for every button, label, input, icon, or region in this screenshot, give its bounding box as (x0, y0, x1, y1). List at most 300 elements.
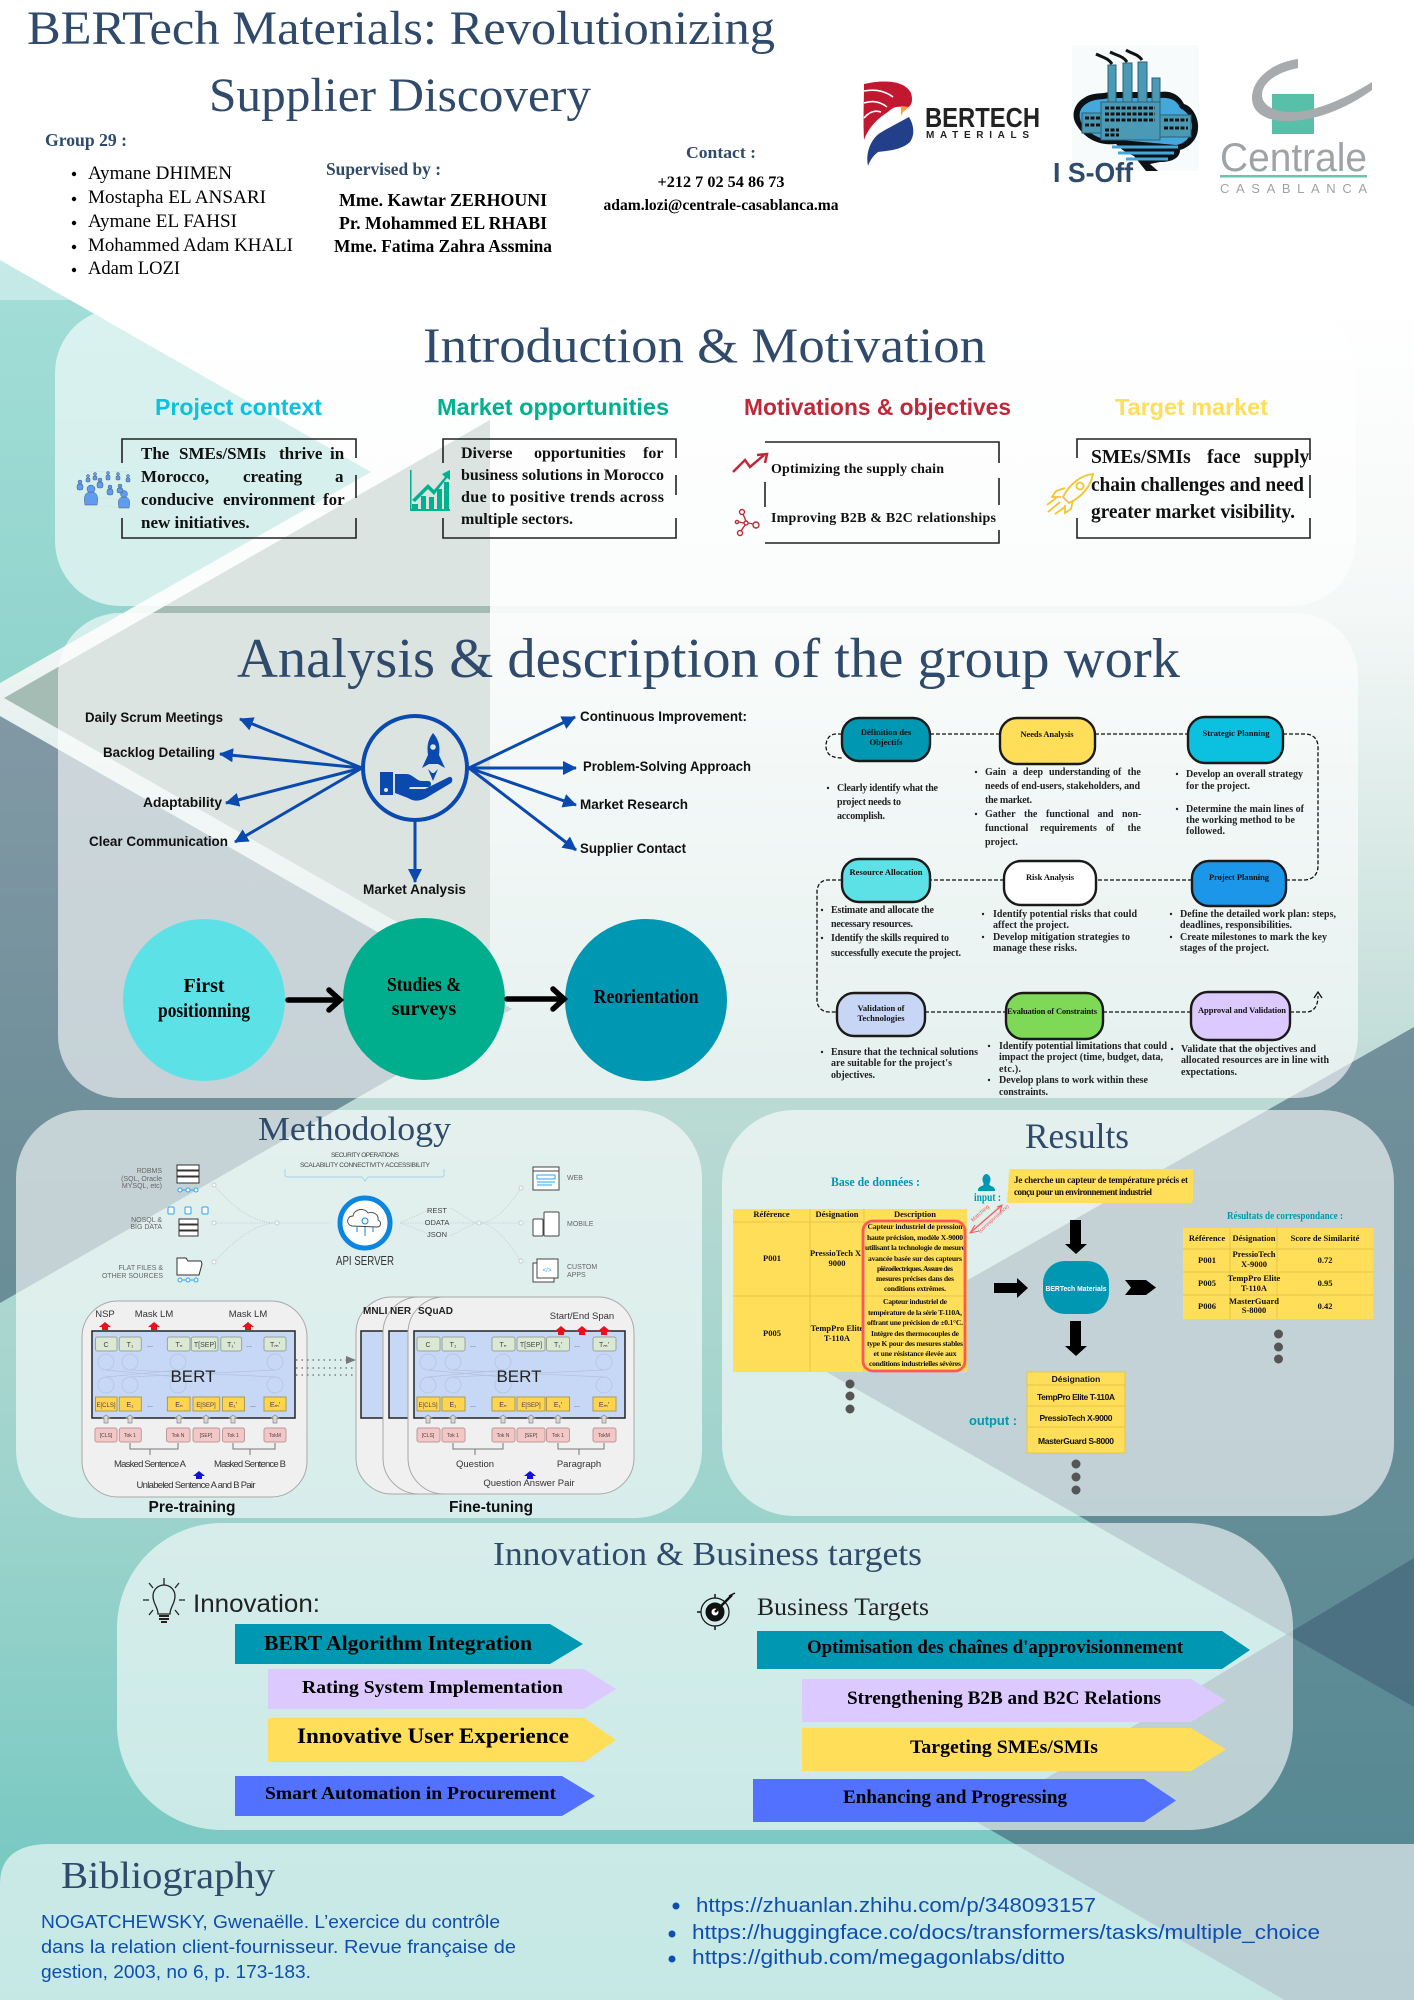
BERTech engine block: BERTech Materials (1046, 1286, 1107, 1293)
matching results table: PressioTech (1233, 1249, 1276, 1259)
matching results table: Désignation (1233, 1233, 1276, 1243)
step descriptions: Develop plans to work within these (999, 1075, 1149, 1086)
logo: BERTech Materials (864, 81, 1040, 166)
input block: Je cherche un capteur de température précis et (1014, 1175, 1188, 1185)
BERT pre-training diagram: NSP (95, 1309, 115, 1320)
step descriptions: a (1012, 767, 1018, 778)
step descriptions: followed. (1186, 826, 1226, 837)
step descriptions: manage these risks. (993, 943, 1078, 954)
group members: Mohammed Adam KHALI (88, 235, 293, 256)
step descriptions: functional (985, 823, 1029, 834)
BERT fine-tuning diagram: T₁ (450, 1342, 457, 1349)
database table: PressioTech X- (810, 1248, 864, 1258)
BERT fine-tuning diagram: T[SEP] (520, 1342, 542, 1349)
pill labels: Objectifs (869, 737, 903, 747)
arrows from hub (220, 717, 576, 882)
BERT fine-tuning diagram: Tₘ' (599, 1342, 609, 1349)
title (27, 2, 775, 122)
project context column: for (323, 490, 345, 509)
target market column (1047, 394, 1310, 538)
output table: PressioTech X-9000 (1040, 1413, 1113, 1423)
hub labels: Backlog Detailing (103, 745, 215, 760)
heading: methodology: Methodology (258, 1111, 451, 1148)
database table: TempPro Elite (811, 1323, 864, 1333)
panel: analysis and description (58, 613, 1358, 1098)
logo: I S-Off (1053, 45, 1199, 188)
BERT fine-tuning diagram: TokM (598, 1433, 610, 1439)
matching results table: 0.72 (1318, 1255, 1332, 1265)
step descriptions: and (1098, 809, 1114, 820)
step descriptions: expectations. (1181, 1067, 1238, 1078)
arrows between circles (288, 989, 564, 1010)
target market column: chain challenges and need (1091, 475, 1304, 496)
hub labels: Market Research (580, 797, 688, 812)
client labels (567, 1175, 597, 1279)
contact: adam.lozi@centrale-casablanca.ma (604, 197, 839, 214)
icon: red network (735, 510, 759, 536)
logo: BERTech Materials: BERTECH (925, 102, 1040, 133)
BERT fine-tuning diagram: ... (574, 1402, 580, 1409)
database table: Capteur industriel de (883, 1297, 948, 1306)
step descriptions: deep (1023, 767, 1043, 778)
data source labels: MYSQL, etc) (122, 1183, 162, 1190)
market opportunities column: Market opportunities (437, 394, 669, 420)
reference text: dans la relation client-fournisseur. Revue française de (41, 1937, 516, 1957)
step descriptions: for the project. (1186, 781, 1250, 792)
BERT fine-tuning diagram (356, 1297, 634, 1494)
title: BERTech Materials: Revolutionizing (27, 2, 775, 55)
supervisors: Mme. Kawtar ZERHOUNI (339, 190, 547, 210)
matching results table: Résultats de correspondance : (1227, 1211, 1343, 1222)
hub labels: Market Analysis (363, 882, 466, 897)
project context column: Project context (155, 394, 322, 420)
hub diagram (85, 709, 751, 897)
BERT pre-training diagram: ... (246, 1342, 252, 1349)
database table: Intègre des thermocouples de (871, 1329, 960, 1338)
BERT fine-tuning diagram: Question Answer Pair (483, 1478, 575, 1489)
target market column: Target market (1115, 394, 1268, 420)
icon: people network (77, 471, 130, 508)
BERT pre-training diagram: Masked Sentence B (214, 1459, 286, 1470)
step descriptions: project. (985, 837, 1018, 848)
BERT pre-training diagram: Eₘ' (270, 1402, 280, 1409)
step descriptions: affect the project. (993, 920, 1070, 931)
dots (1072, 1460, 1080, 1494)
icon: client apps: </> (543, 1268, 552, 1274)
icon: API server: API SERVER (336, 1254, 394, 1268)
BERT fine-tuning diagram: [SEP] (525, 1433, 538, 1439)
reference text: NOGATCHEWSKY, Gwenaëlle. L’exercice du contrôle (41, 1912, 500, 1932)
project context column: in (330, 444, 345, 463)
step descriptions: needs of end-users, stakeholders, and (985, 781, 1140, 792)
icon: target (697, 1593, 735, 1630)
pill labels: Technologies (858, 1013, 905, 1023)
BERT pre-training diagram: TokM (269, 1433, 281, 1439)
matching results table: P005 (1198, 1278, 1216, 1288)
target market column: face (1207, 447, 1241, 468)
input block: input : (974, 1190, 1001, 1204)
step descriptions: Validate that the objectives and (1181, 1044, 1316, 1055)
group members (45, 130, 293, 279)
step descriptions: project needs to (837, 797, 901, 808)
database table: type K pour des mesures stables (867, 1339, 963, 1348)
process circles (123, 918, 727, 1081)
BERT fine-tuning diagram: E₁' (554, 1402, 562, 1409)
BERT fine-tuning diagram: Tok N (497, 1433, 510, 1439)
matching results table: 0.42 (1318, 1301, 1332, 1311)
matching arrow: (correspondance) (977, 1204, 1011, 1234)
BERT fine-tuning diagram: Start/End Span (550, 1311, 614, 1322)
innovation list (143, 1578, 616, 1816)
database table: Capteur industriel de pression (868, 1222, 963, 1231)
database table: conditions industrielles sévères (869, 1359, 961, 1368)
BERT pre-training diagram: ... (147, 1402, 153, 1409)
contact (604, 143, 839, 214)
database table: Base de données : (831, 1174, 920, 1189)
database table (733, 1174, 967, 1372)
BERT fine-tuning diagram: [CLS] (422, 1433, 435, 1439)
pill labels (850, 727, 1286, 1023)
database table: conditions extrêmes. (884, 1284, 946, 1293)
BERT pre-training diagram: ... (250, 1402, 256, 1409)
connector lines (214, 1185, 521, 1262)
BERT pre-training diagram: T₁' (227, 1342, 235, 1349)
matching results table: TempPro Elite (1228, 1273, 1281, 1283)
step descriptions: Estimate and allocate the (831, 905, 935, 916)
target market column: SMEs/SMIs (1091, 447, 1191, 468)
motivations and objectives column (733, 394, 1011, 543)
BERT fine-tuning diagram: NER (390, 1306, 412, 1317)
matching results table: S-8000 (1242, 1305, 1266, 1315)
client labels: APPS (567, 1272, 586, 1279)
BERT pre-training diagram: Unlabeled Sentence A and B Pair (136, 1480, 256, 1491)
logo: I S-Off: I S-Off (1053, 157, 1134, 188)
heading: bibliography: Bibliography (61, 1855, 275, 1897)
black flow arrows (994, 1220, 1156, 1356)
market opportunities column: opportunities (534, 445, 626, 462)
BERT pre-training diagram: C (103, 1342, 109, 1349)
BERT fine-tuning diagram: BERT (496, 1367, 542, 1386)
group members: Group 29 : (45, 130, 127, 150)
market opportunities column: for (643, 445, 663, 462)
web links (668, 1895, 1320, 1969)
step descriptions: functional (1046, 809, 1090, 820)
icon: hand and rocket (363, 716, 467, 820)
supervisors: Mme. Fatima Zahra Assmina (334, 236, 552, 256)
database table: Description (894, 1209, 936, 1219)
process circles: Studies & (387, 974, 461, 996)
motivations and objectives column: Improving B2B & B2C relationships (771, 511, 997, 526)
API server diagram (102, 1152, 597, 1282)
panel: introduction and motivation (55, 308, 1356, 606)
BERT pre-training diagram: E[CLS] (96, 1403, 116, 1409)
flowchart (817, 717, 1336, 1098)
database table: mesures précises dans des (876, 1274, 954, 1283)
BERT fine-tuning diagram: Tₙ (499, 1342, 507, 1349)
target market column: greater market visibility. (1091, 502, 1295, 523)
step descriptions: Determine the main lines of (1186, 804, 1305, 815)
innovation list: BERT Algorithm Integration (264, 1631, 532, 1655)
step descriptions: the working method to be (1186, 815, 1296, 826)
data source labels: BIG DATA (130, 1224, 162, 1231)
BERT fine-tuning diagram: E[CLS] (418, 1403, 438, 1409)
database table: P005 (763, 1328, 781, 1338)
icon: red trend arrow (733, 454, 767, 472)
hub labels: Supplier Contact (580, 841, 686, 856)
icon: client apps (533, 1167, 559, 1282)
step descriptions: the market. (985, 795, 1032, 806)
matching results table: T-110A (1241, 1283, 1268, 1293)
panel: results (722, 1110, 1394, 1516)
database table: température de la série T-110A, (868, 1308, 962, 1317)
heading: results: Results (1025, 1116, 1129, 1156)
database table: Désignation (816, 1209, 859, 1219)
step descriptions: Identify potential risks that could (993, 909, 1137, 920)
label: fine-tuning: Fine-tuning (449, 1499, 533, 1516)
step descriptions: Define the detailed work plan: steps, (1180, 909, 1336, 920)
BERT fine-tuning diagram: ... (470, 1402, 476, 1409)
hub labels: Daily Scrum Meetings (85, 710, 223, 725)
dots (1274, 1330, 1283, 1364)
protocol labels (425, 1206, 449, 1239)
step descriptions: allocated resources are in line with (1181, 1055, 1329, 1066)
BERT fine-tuning diagram: Question (456, 1459, 494, 1470)
BERT fine-tuning diagram: Tok 1 (552, 1433, 564, 1439)
BERT fine-tuning diagram: E[SEP] (521, 1403, 541, 1409)
BERT pre-training diagram (82, 1301, 307, 1497)
business targets list: Targeting SMEs/SMIs (910, 1738, 1098, 1758)
market opportunities column: Diverse (461, 445, 513, 462)
icon: API server (336, 1198, 394, 1268)
database table: avancée basée sur des capteurs (868, 1254, 962, 1263)
project context column: new initiatives. (141, 513, 250, 532)
output table: MasterGuard S-8000 (1038, 1436, 1114, 1446)
step descriptions: necessary resources. (831, 919, 914, 930)
matching results table: X-9000 (1241, 1259, 1267, 1269)
project context column: creating (243, 467, 303, 486)
project context column: thrive (279, 444, 323, 463)
project context column: conducive (141, 490, 214, 509)
step descriptions: understanding (1049, 767, 1110, 778)
step descriptions: successfully execute the project. (831, 948, 962, 959)
pill labels: Evaluation of Constraints (1007, 1006, 1098, 1016)
BERT fine-tuning diagram: E₁ (449, 1402, 457, 1409)
hub labels (85, 709, 751, 897)
capability labels (300, 1152, 431, 1169)
step descriptions: constraints. (999, 1087, 1048, 1098)
logo: BERTech Materials: MATERIALS (926, 130, 1034, 141)
pill labels: Validation of (858, 1003, 905, 1013)
step descriptions: Identify the skills required to (831, 933, 949, 944)
BERT pre-training diagram: E[SEP] (196, 1403, 216, 1409)
transfer arrows (296, 1356, 414, 1379)
supervisors (326, 159, 552, 256)
hub labels: Problem-Solving Approach (583, 759, 751, 774)
BERT pre-training diagram: Tₙ (175, 1342, 183, 1349)
data source labels (102, 1168, 163, 1280)
project context column: SMEs/SMIs (179, 444, 266, 463)
project context column: Morocco, (141, 467, 209, 486)
pill labels: Strategic Planning (1202, 728, 1270, 738)
step descriptions: Gain (985, 767, 1007, 778)
project context column: environment (223, 490, 316, 509)
group members: Aymane EL FAHSI (88, 211, 237, 232)
BERT pre-training diagram: E₁' (229, 1402, 237, 1409)
business targets list: Business Targets (757, 1594, 929, 1621)
hub labels: Adaptability (143, 795, 222, 810)
BERT pre-training diagram: BERT (170, 1367, 216, 1386)
logo: Centrale Casablanca: CASABLANCA (1220, 181, 1367, 196)
step descriptions (821, 767, 1336, 1098)
process pills (837, 717, 1290, 1040)
data source labels: (SQL, Oracle (121, 1176, 162, 1183)
icon: user (978, 1174, 995, 1191)
market opportunities column: due to positive trends across (461, 489, 664, 506)
matching results table: Score de Similarité (1291, 1233, 1360, 1243)
logo: Centrale Casablanca: Centrale (1220, 136, 1367, 180)
client labels: CUSTOM (567, 1264, 597, 1271)
step descriptions: of (1113, 767, 1122, 778)
step descriptions: the (1128, 823, 1141, 834)
input block: conçu pour un environnement industriel (1014, 1187, 1152, 1197)
step descriptions: Identify potential limitations that could (999, 1041, 1167, 1052)
step descriptions: deadlines, responsibilities. (1180, 920, 1292, 931)
data source labels: FLAT FILES & (119, 1265, 163, 1272)
business targets list (697, 1593, 1250, 1822)
process circles: surveys (392, 998, 456, 1020)
BERT pre-training diagram: Mask LM (229, 1309, 267, 1320)
BERT pre-training diagram: Tok 1 (124, 1433, 136, 1439)
process circles: First (183, 975, 225, 997)
pill labels: Approval and Validation (1198, 1005, 1286, 1015)
contact: +212 7 02 54 86 73 (658, 174, 785, 191)
BERT fine-tuning diagram: Tok 1 (447, 1433, 459, 1439)
innovation list: Innovative User Experience (297, 1723, 569, 1748)
icon: data sources (177, 1165, 202, 1275)
matching results table: MasterGuard (1229, 1296, 1279, 1306)
BERT fine-tuning diagram: SQuAD (418, 1306, 453, 1317)
group members: Aymane DHIMEN (88, 163, 232, 184)
BERT pre-training diagram: Masked Sentence A (114, 1459, 187, 1470)
innovation list: Innovation: (193, 1590, 320, 1618)
BERT pre-training diagram: [SEP] (200, 1433, 213, 1439)
database table: P001 (763, 1253, 781, 1263)
step descriptions: of (1106, 823, 1115, 834)
project context column (77, 394, 356, 538)
client labels: MOBILE (567, 1221, 594, 1228)
BERT pre-training diagram: T[SEP] (194, 1342, 216, 1349)
panel: innovation and business targets (117, 1523, 1293, 1830)
title: Supplier Discovery (209, 69, 591, 122)
BERT pre-training diagram: Tok N (172, 1433, 185, 1439)
pill labels: Risk Analysis (1026, 872, 1075, 882)
hub labels: Clear Communication (89, 834, 228, 849)
hub labels: Continuous Improvement: (580, 709, 747, 724)
matching results table: Référence (1189, 1233, 1225, 1243)
BERT pre-training diagram: Eₙ (175, 1402, 183, 1409)
input block (974, 1169, 1193, 1204)
motivations and objectives column: Motivations & objectives (744, 394, 1011, 420)
step descriptions: Clearly identify what the (837, 783, 939, 794)
business targets list: Enhancing and Progressing (843, 1788, 1068, 1808)
database table: haute précision, modèle X-9000 (867, 1233, 963, 1242)
protocol labels: JSON (427, 1230, 447, 1239)
protocol labels: ODATA (425, 1218, 449, 1227)
target market column: supply (1254, 447, 1310, 468)
step descriptions: impact the project (time, budget, data, (999, 1052, 1164, 1063)
protocol labels: REST (427, 1206, 447, 1215)
database table: utilisant la technologie de mesure (865, 1243, 966, 1252)
BERT fine-tuning diagram: Paragraph (557, 1459, 601, 1470)
matching results table: P006 (1198, 1301, 1216, 1311)
business targets list: Strengthening B2B and B2C Relations (847, 1689, 1161, 1709)
project context column: The (141, 444, 170, 463)
step descriptions: requirements (1040, 823, 1097, 834)
BERT pre-training diagram: T₁ (127, 1342, 134, 1349)
group members: Adam LOZI (88, 258, 180, 279)
step descriptions: etc.). (999, 1064, 1022, 1075)
step descriptions: the (1024, 809, 1038, 820)
step descriptions: non- (1122, 809, 1141, 820)
business targets list: Optimisation des chaînes d'approvisionnement (807, 1638, 1184, 1658)
database table: T-110A (824, 1333, 851, 1343)
icon: growth chart (410, 470, 450, 511)
market opportunities column: business solutions in Morocco (461, 467, 664, 484)
matching arrow: Matching (970, 1204, 991, 1223)
data source labels: OTHER SOURCES (102, 1273, 163, 1280)
capability labels: SECURITY OPERATIONS (331, 1152, 400, 1159)
BERT pre-training diagram: [CLS] (100, 1433, 113, 1439)
reference text (41, 1912, 516, 1982)
market opportunities column (410, 394, 676, 538)
icon: light bulb (143, 1578, 185, 1622)
step descriptions: Develop mitigation strategies to (993, 932, 1130, 943)
matching results table (1183, 1211, 1374, 1319)
pill labels: Needs Analysis (1020, 729, 1074, 739)
step descriptions: accomplish. (837, 811, 886, 822)
heading: introduction: Introduction & Motivation (423, 317, 986, 373)
web links: https://zhuanlan.zhihu.com/p/348093157 (696, 1895, 1096, 1917)
output table: TempPro Elite T-110A (1037, 1392, 1115, 1402)
BERT fine-tuning diagram: Eₙ (499, 1402, 507, 1409)
web links: https://huggingface.co/docs/transformers/tasks/multiple_choice (692, 1922, 1320, 1944)
BERT pre-training diagram: Tok 1 (227, 1433, 239, 1439)
contact: Contact : (686, 143, 756, 162)
innovation list: Rating System Implementation (302, 1677, 563, 1697)
data source labels: RDBMS (137, 1168, 162, 1175)
step descriptions: Gather (985, 809, 1016, 820)
BERT fine-tuning diagram: T₁' (554, 1342, 562, 1349)
matching results table: P001 (1198, 1255, 1216, 1265)
step descriptions: stages of the project. (1180, 943, 1270, 954)
BERT fine-tuning diagram: ... (470, 1342, 476, 1349)
step descriptions: are suitable for the project's (831, 1058, 952, 1069)
BERT fine-tuning diagram: ... (574, 1342, 580, 1349)
heading: innovation and business: Innovation & Business targets (493, 1536, 922, 1573)
BERT pre-training diagram: ... (147, 1342, 153, 1349)
project context column: a (335, 467, 344, 486)
process circles: positionning (158, 1000, 250, 1022)
BERT pre-training diagram: E₁ (126, 1402, 134, 1409)
logo: Centrale Casablanca (1220, 59, 1372, 196)
web links: https://github.com/megagonlabs/ditto (692, 1947, 1065, 1969)
pill labels: Resource Allocation (850, 867, 923, 877)
dashed connectors (817, 734, 1318, 1012)
step descriptions: Create milestones to mark the key (1180, 932, 1327, 943)
supervisors: Supervised by : (326, 159, 441, 179)
BERT pre-training diagram: Mask LM (135, 1309, 173, 1320)
step descriptions: the (1128, 767, 1141, 778)
